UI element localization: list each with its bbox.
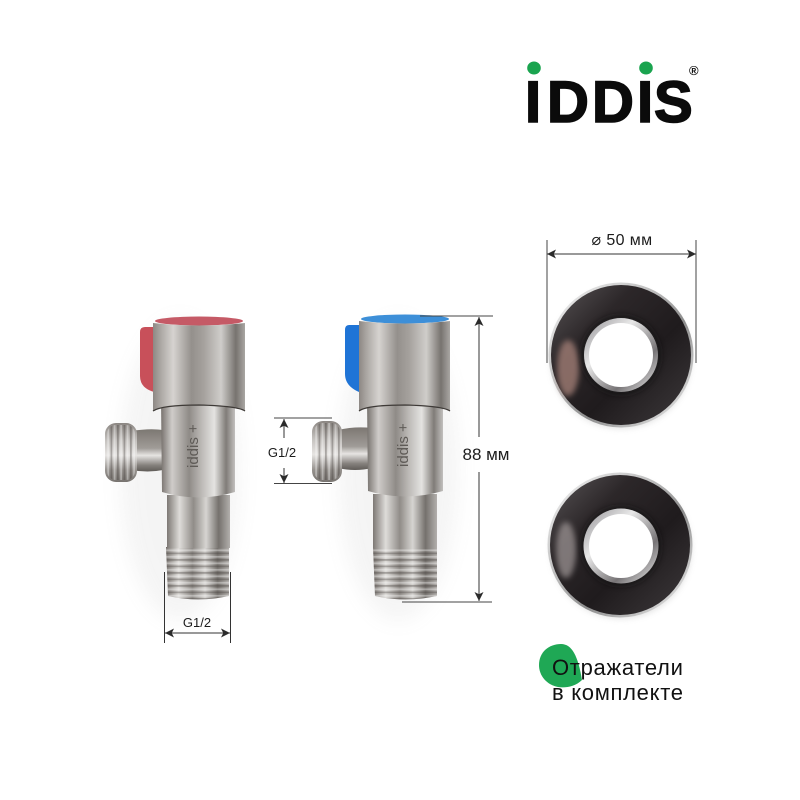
arrow up xyxy=(478,317,480,437)
logo: IDDIS xyxy=(525,62,699,135)
arrow up xyxy=(283,419,285,438)
disc hole xyxy=(589,323,653,387)
valve: blue handle xyxy=(312,314,458,620)
lower threaded end xyxy=(373,547,437,600)
red cap top xyxy=(155,316,243,326)
side outlet stub xyxy=(131,429,163,472)
label: G1/2 xyxy=(268,445,296,460)
label: G1/2 xyxy=(183,615,211,630)
lower body xyxy=(373,494,437,548)
middle body xyxy=(161,398,235,498)
disc inner shadow xyxy=(581,315,661,395)
disc highlight xyxy=(557,340,579,396)
valve shadow xyxy=(338,320,458,620)
disc inner ring xyxy=(584,508,658,584)
disc inner shadow xyxy=(581,506,661,586)
disc hole xyxy=(589,514,653,578)
registered mark: ® xyxy=(689,63,699,78)
disc face xyxy=(550,475,690,615)
arrow line xyxy=(165,632,230,634)
logo dot right xyxy=(639,62,653,74)
label: 88 мм xyxy=(462,445,510,464)
valve shadow xyxy=(120,320,240,620)
blue handle xyxy=(345,325,359,392)
disc inner ring xyxy=(584,318,658,392)
dimension: side G1/2 xyxy=(268,418,332,484)
cap lip shadow xyxy=(359,405,450,411)
valve: red handle xyxy=(105,316,245,620)
disc face xyxy=(551,285,691,425)
extension lines xyxy=(547,240,696,363)
dimension: diameter 50 mm xyxy=(547,232,696,363)
caption text: Отражатели xyxy=(552,655,684,680)
dimension: bottom G1/2 xyxy=(164,572,230,643)
disc shadow xyxy=(550,477,692,619)
extension lines xyxy=(274,418,332,484)
steel cap xyxy=(359,321,450,411)
steel cap xyxy=(153,323,245,411)
logo dot left xyxy=(527,62,541,74)
arrow down xyxy=(283,468,285,483)
dimension: height 88 mm xyxy=(402,316,510,602)
disc highlight xyxy=(556,522,576,578)
caption with green blob xyxy=(539,644,684,705)
side outlet nut xyxy=(312,421,342,482)
middle body xyxy=(367,398,443,496)
red handle xyxy=(140,327,154,392)
body engraving: iddis + xyxy=(185,424,202,468)
extension lines xyxy=(164,572,230,643)
reflector disc top xyxy=(548,282,694,429)
side outlet nut xyxy=(105,423,137,482)
arrow down xyxy=(478,472,480,601)
extension lines xyxy=(402,316,493,602)
lower threaded end xyxy=(166,547,229,600)
arrow line xyxy=(547,253,696,255)
side outlet stub xyxy=(338,427,372,470)
body engraving: iddis + xyxy=(395,423,412,467)
label: ⌀ 50 мм xyxy=(591,232,653,249)
cap lip shadow xyxy=(153,405,245,411)
logo wordmark: IDDIS xyxy=(525,70,693,135)
blue cap top xyxy=(361,314,449,324)
disc rim xyxy=(548,472,692,618)
caption text: в комплекте xyxy=(552,680,684,705)
green blob xyxy=(539,644,582,687)
disc rim xyxy=(548,282,694,428)
lower body xyxy=(167,495,230,548)
reflector disc bottom xyxy=(548,472,692,619)
disc shadow xyxy=(550,287,692,429)
